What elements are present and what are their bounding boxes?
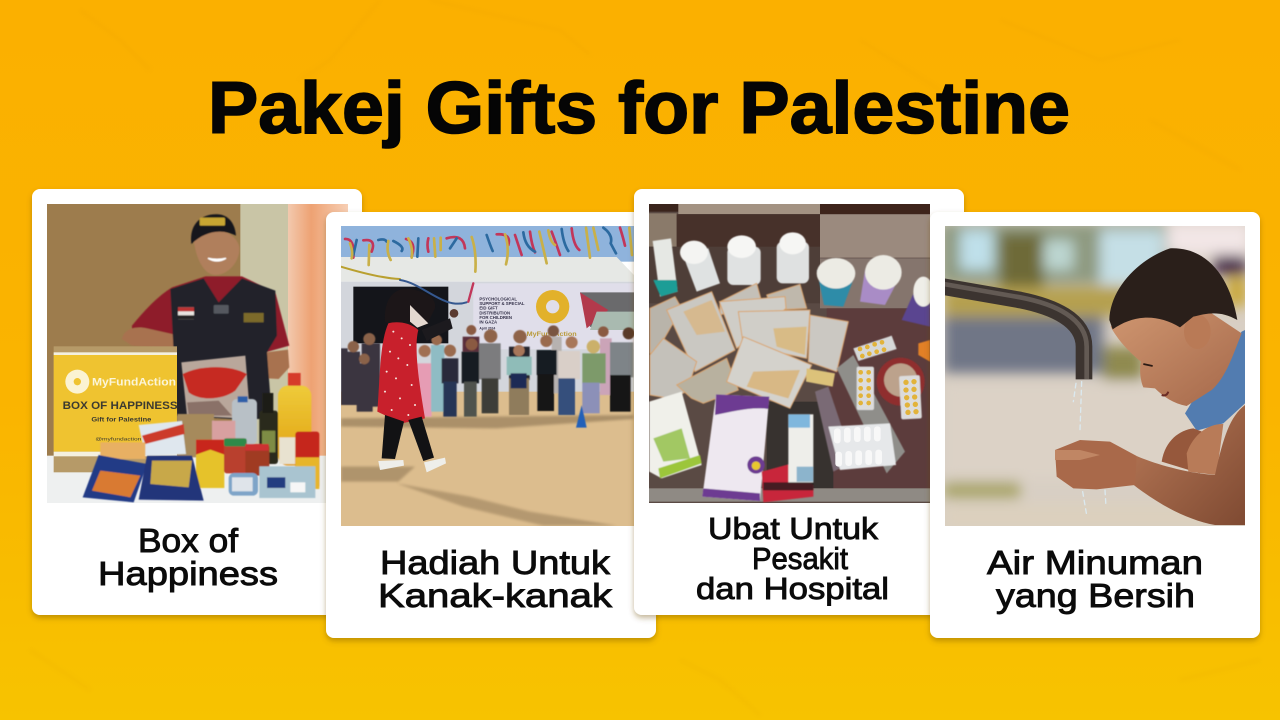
bottles: [649, 232, 933, 502]
photo: children with mascot: MyFundAction: [527, 331, 577, 338]
photo: volunteer with box of happiness: MyFundAction: [92, 377, 176, 389]
photo: children with mascot: [340, 225, 635, 527]
medicine boxes: [649, 392, 702, 478]
photo: volunteer with box of happiness: Gift for Palestine: [91, 417, 152, 423]
photo: children with mascot: SUPPORT & SPECIAL: [479, 301, 525, 306]
panel: Ubat Untuk Pesakit dan Hospital: [634, 189, 964, 615]
panel: Box of Happiness: [32, 189, 362, 615]
label: Ubat Untuk: [708, 511, 879, 546]
label: dan Hospital: [696, 571, 889, 606]
children: [341, 325, 635, 428]
garland: [341, 228, 632, 304]
label: [987, 544, 1203, 614]
label: Box of: [138, 522, 239, 559]
sachets: [650, 283, 848, 408]
photo: children with mascot: DISTRIBUTION: [479, 310, 510, 315]
photo: medicines on glass table: [648, 203, 933, 503]
label: [98, 522, 278, 592]
label: Kanak-kanak: [378, 577, 613, 614]
photo: children with mascot: PSYCHOLOGICAL: [479, 296, 517, 301]
photo: volunteer with box of happiness: @myfundaction: [95, 437, 142, 442]
water stream: [1073, 382, 1106, 515]
photo: children with mascot: IN GAZA: [479, 320, 498, 325]
label: yang Bersih: [996, 577, 1195, 614]
boy: [1055, 248, 1245, 525]
label: Hadiah Untuk: [380, 544, 611, 581]
label: Pesakit: [752, 541, 848, 576]
photo: children with mascot: FOR CHILDREN: [479, 315, 512, 320]
photo: volunteer with box of happiness: BOX OF HAPPINESS: [63, 400, 178, 412]
panel: Hadiah Untuk Kanak-kanak: [326, 212, 656, 638]
panel: Air Minuman yang Bersih: [930, 212, 1260, 638]
label: [378, 544, 613, 614]
groceries: [83, 356, 319, 502]
mascot: [377, 289, 458, 472]
photo: children with mascot: April 2024: [479, 326, 495, 330]
photo: boy drinking from a tap: [940, 223, 1250, 530]
blister packs: [837, 355, 905, 473]
label: Air Minuman: [987, 544, 1203, 581]
label: Happiness: [98, 555, 278, 592]
yellow box: [54, 346, 177, 472]
water tap: [943, 284, 1087, 379]
photo: volunteer with box of happiness: [47, 203, 355, 504]
label: [696, 511, 889, 606]
man shirt and arms: [132, 276, 289, 352]
title: Pakej Gifts for Palestine: [208, 68, 1070, 149]
photo: children with mascot: EID GIFT: [479, 306, 498, 311]
